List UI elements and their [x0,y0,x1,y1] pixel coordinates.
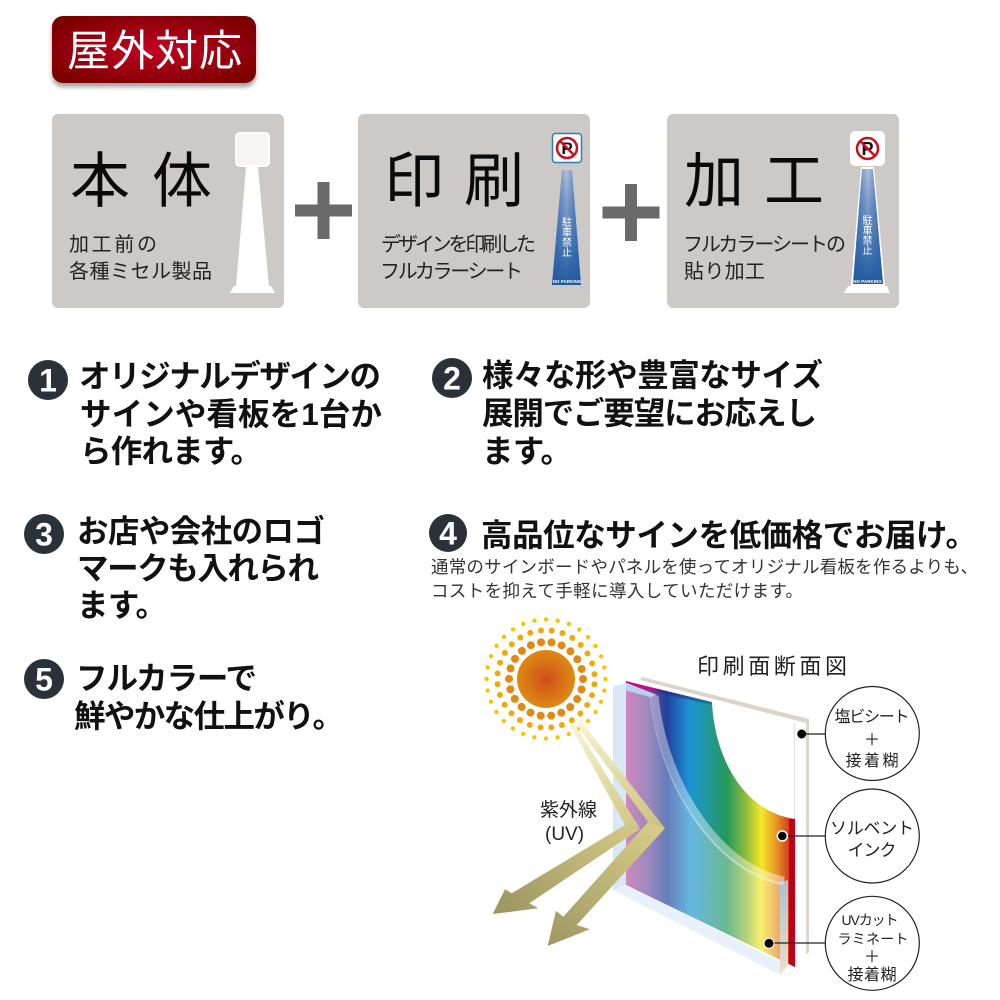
heading: body: 本体 [70,148,212,215]
callout: PVC sheet and adhesive [797,686,919,780]
label: UV [540,799,597,845]
heading: processing: 加工 [684,148,824,215]
feature 4 [429,514,978,601]
text: feature 3: マークも入れられ [77,550,319,586]
text: processing description [683,234,846,283]
text: feature 3: ます。 [77,587,167,623]
callout: solvent ink: ソルベント [830,819,914,838]
panel: printing [358,114,590,308]
laminated board [613,677,809,975]
icon: finished sign: 禁 [862,235,872,247]
icon: sun [486,620,606,738]
icon: number 5 [24,659,64,699]
text: feature 2: 様々な形や豊富なサイズ [482,357,823,393]
icon: blank white stand [230,133,275,293]
icon: finished sign: NO PARKING [853,279,882,284]
callout: UV cut laminate and adhesive [764,896,919,990]
label: UV: 紫外線 [540,799,597,821]
arrow: UV beam two [548,721,665,946]
icon: printed sheet: 駐 [562,216,572,229]
icon: printed sheet: 禁 [562,237,572,249]
text: feature 3: お店や会社のロゴ [77,513,325,549]
icon: number 5: 5 [35,662,53,698]
icon: plus one [295,182,352,239]
icon: printed sheet [552,134,582,285]
text: feature 4 detail: 通常のサインボードやパネルを使ってオリジナル看板を作るよりも、 [431,557,978,577]
icon: printed sheet: 車 [562,226,572,239]
panel: processing [667,114,899,308]
panel: body [52,114,284,308]
text: body description: 加工前の [69,233,157,256]
text: body description [69,233,212,283]
icon: finished sign [844,132,890,293]
label: UV: (UV) [545,824,584,845]
icon: number 2 [432,358,472,398]
icon: finished sign: 駐 [862,214,872,227]
icon: number 2: 2 [443,360,461,396]
callout: solvent ink: インク [848,841,896,860]
text: feature 5: 鮮やかな仕上がり。 [74,698,344,734]
text: feature 1: ら作れます。 [80,433,262,469]
icon: finished sign: 止 [862,245,872,257]
text: feature 2: 展開でご要望にお応えし [482,395,817,431]
text: printing description: デザインを印刷した [381,233,536,256]
callout: UV cut laminate and adhesive: UVカット [842,912,898,928]
text: feature 2: ます。 [482,433,572,469]
text: feature 1: オリジナルデザインの [79,358,381,394]
feature 5 [24,659,344,734]
text: printing description: フルカラーシート [380,261,523,283]
callout: UV cut laminate and adhesive: ＋ [864,949,880,966]
diagram: print cross-section [486,620,919,990]
text: processing description: フルカラーシートの [683,234,846,256]
callout: PVC sheet and adhesive: 接着糊 [846,752,898,770]
icon: finished sign: P [861,139,874,159]
icon: number 4: 4 [439,516,457,552]
icon: number 1 [28,360,68,400]
text: feature 1: サインや看板を1台か [80,396,382,432]
icon: printed sheet: 止 [562,247,572,259]
text: feature 4 detail: コストを抑えて手軽に導入していただけます。 [431,581,803,601]
text: processing description: 貼り加工 [684,260,765,283]
feature 1 [28,358,382,469]
badge: outdoor use: 屋外対応 [67,28,242,76]
callout: UV cut laminate and adhesive: ラミネート [838,931,908,947]
callout: UV cut laminate and adhesive: 接着糊 [848,966,896,984]
text: feature 2 [482,357,823,469]
text: feature 3 [77,513,325,623]
text: feature 5 [74,660,344,734]
text: body description: 各種ミセル製品 [69,260,212,283]
text: feature 4 heading: 高品位なサインを低価格でお届け。 [481,517,977,553]
icon: printed sheet: NO PARKING [553,279,582,284]
feature 3 [24,513,325,623]
text: feature 5: フルカラーで [76,660,257,696]
text: printing description [380,233,536,283]
title: cross-section: 印刷面断面図 [697,654,847,679]
icon: finished sign: 車 [862,224,872,237]
icon: printed sheet: P [561,139,573,158]
arrow: UV beam one [493,725,640,914]
icon: number 3 [24,514,64,554]
badge: outdoor use [52,16,256,83]
feature 2 [432,357,823,469]
icon: number 4 [429,514,467,552]
text: feature 4 detail [431,557,978,601]
icon: plus two [602,184,660,241]
icon: number 1: 1 [39,362,57,398]
heading: printing: 印刷 [384,148,524,215]
callout: solvent ink [777,789,919,883]
text: feature 1 [79,358,382,469]
callout: PVC sheet and adhesive: ＋ [864,732,880,749]
icon: number 3: 3 [35,516,53,552]
callout: PVC sheet and adhesive: 塩ビシート [834,708,910,726]
